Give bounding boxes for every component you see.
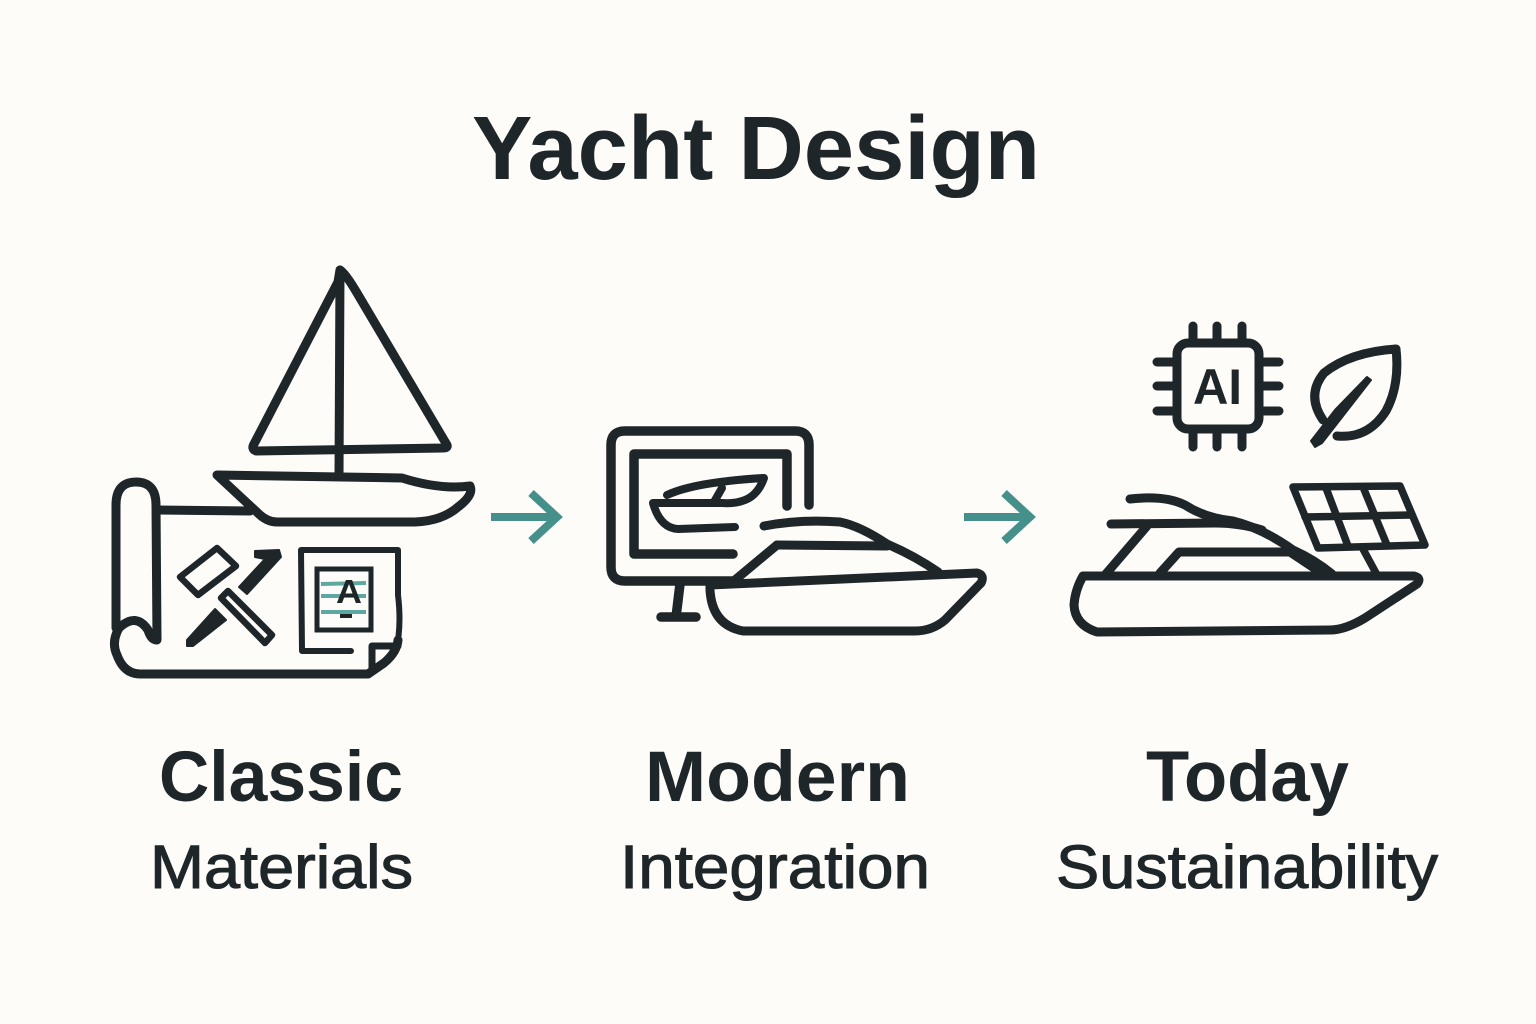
heading: Classic: Classic	[159, 738, 403, 817]
icon: solar panel	[1293, 486, 1425, 573]
icon: drawing sheet: A	[336, 573, 362, 610]
icon: hammer	[180, 548, 272, 643]
icon: leaf	[1311, 349, 1397, 447]
icon: drawing sheet	[317, 569, 371, 630]
icon: computer monitor	[611, 431, 809, 617]
panel: today	[1056, 326, 1439, 901]
heading: Today: Today	[1146, 738, 1349, 817]
icon: sustainable yacht	[1074, 498, 1419, 632]
panel: classic	[114, 270, 471, 901]
icon: AI chip: AI	[1193, 359, 1242, 415]
heading: Modern: Modern	[645, 738, 910, 817]
panel: modern	[611, 431, 982, 901]
icon: blueprint scroll	[114, 482, 399, 674]
arrow: classic to modern	[491, 493, 557, 541]
arrow: modern to today	[964, 493, 1030, 541]
title: Yacht Design	[472, 99, 1040, 199]
icon: motor yacht	[710, 521, 982, 631]
icon: pencil	[187, 550, 281, 646]
icon: small boat on screen	[653, 478, 764, 529]
text: Integration: Integration	[620, 833, 930, 901]
text: Materials: Materials	[150, 833, 413, 901]
text: Sustainability: Sustainability	[1056, 833, 1439, 901]
icon: sailboat	[217, 270, 471, 522]
icon: AI chip	[1157, 326, 1279, 447]
